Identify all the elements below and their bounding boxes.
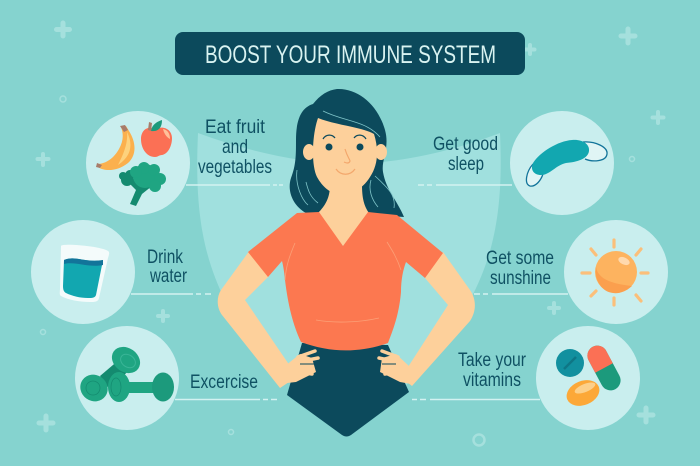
icon: pills bbox=[556, 342, 624, 410]
panel: exercise bbox=[75, 326, 179, 430]
shield background bbox=[197, 133, 501, 432]
nose and smile bbox=[336, 149, 355, 174]
icon: dumbbells bbox=[75, 342, 174, 407]
neck bbox=[318, 185, 369, 246]
panel: fruit and vegetables bbox=[86, 111, 190, 215]
label: eat fruit: Eat fruit bbox=[205, 117, 266, 138]
label: eat fruit bbox=[198, 117, 272, 178]
icon: sun bbox=[582, 240, 648, 305]
label: take your vitamins: vitamins bbox=[463, 370, 521, 391]
panel: vitamins bbox=[536, 326, 640, 430]
label: get some sunshine: Get some bbox=[486, 248, 554, 269]
label: take your vitamins bbox=[458, 350, 527, 391]
title bar bbox=[175, 32, 525, 75]
label: eat fruit: and bbox=[222, 137, 248, 158]
label: get good sleep bbox=[433, 134, 498, 175]
label: eat fruit: vegetables bbox=[198, 157, 272, 178]
hair strands bbox=[297, 111, 394, 208]
label: exercise: Excercise bbox=[190, 372, 258, 393]
eyes and eyebrows bbox=[323, 135, 366, 150]
character: woman bbox=[218, 89, 475, 436]
label: drink water bbox=[147, 247, 188, 287]
label: drink water: water bbox=[149, 266, 188, 287]
label: drink water: Drink bbox=[147, 247, 183, 268]
label: get good sleep: sleep bbox=[448, 154, 484, 175]
icon: glass of water bbox=[60, 245, 109, 302]
title bar: BOOST YOUR IMMUNE SYSTEM bbox=[205, 41, 496, 69]
label: take your vitamins: Take your bbox=[458, 350, 527, 371]
label: get good sleep: Get good bbox=[433, 134, 498, 155]
label: get some sunshine bbox=[486, 248, 554, 289]
icon: broccoli bbox=[119, 162, 166, 206]
ears bbox=[303, 144, 315, 160]
connector lines bbox=[131, 185, 568, 400]
face bbox=[313, 118, 377, 195]
icon: sleep mask bbox=[526, 140, 607, 186]
panel: water bbox=[31, 220, 135, 324]
icon: apple bbox=[141, 120, 172, 157]
icon: banana bbox=[96, 125, 134, 170]
panel: sunshine bbox=[564, 220, 668, 324]
label: get some sunshine: sunshine bbox=[490, 268, 551, 289]
arms bbox=[218, 250, 475, 388]
panel: sleep bbox=[510, 111, 614, 215]
shirt bbox=[248, 212, 443, 350]
shorts bbox=[287, 343, 409, 436]
hands bbox=[285, 351, 411, 384]
hair bbox=[290, 89, 404, 217]
